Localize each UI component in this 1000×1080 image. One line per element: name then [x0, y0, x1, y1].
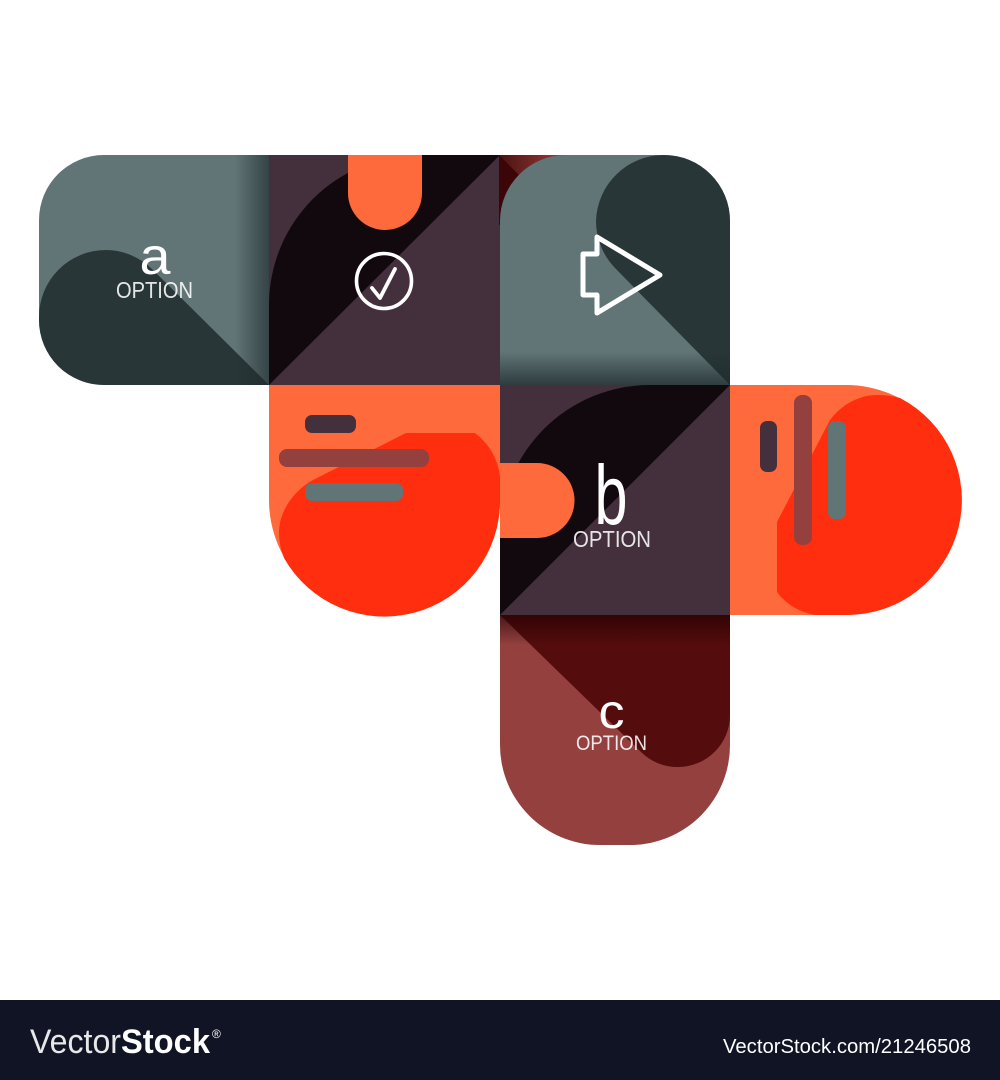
dark fold a	[39, 250, 269, 385]
corner fold behind play tile	[499, 155, 570, 225]
letter b: b	[594, 448, 628, 542]
dark fold c	[500, 615, 730, 767]
footer url: VectorStock.com/21246508	[723, 1036, 971, 1058]
label a: OPTION	[116, 277, 193, 303]
icon: check circle	[356, 254, 412, 308]
bar short	[305, 415, 356, 433]
panel: option c	[500, 615, 730, 845]
panel: orange bars horizontal	[269, 385, 500, 617]
panel: option a	[39, 155, 269, 385]
bar medium vertical	[828, 421, 846, 519]
bar long vertical	[794, 395, 812, 545]
label c: OPTION	[576, 732, 647, 755]
bar short vertical	[760, 421, 777, 472]
bar medium	[305, 483, 403, 501]
panel: play tile	[500, 155, 730, 385]
bar long	[279, 449, 429, 467]
red blob right	[777, 395, 962, 615]
panel: check tile	[269, 155, 500, 385]
label b: OPTION	[573, 526, 651, 552]
registered mark: ®	[212, 1027, 221, 1041]
panel: option b	[500, 385, 730, 615]
red blob	[279, 433, 500, 617]
dark fold check tile	[269, 155, 500, 385]
letter c: c	[598, 686, 624, 739]
orange tab side	[500, 463, 574, 538]
dark fold play tile	[596, 155, 730, 385]
icon: arrow	[583, 237, 660, 313]
dark fold b	[500, 385, 730, 615]
footer logo bold: Stock	[121, 1023, 210, 1061]
orange tab top	[348, 155, 422, 230]
panel: orange bars vertical	[730, 385, 962, 615]
footer logo: Vector	[30, 1023, 121, 1061]
letter a: a	[140, 228, 171, 286]
footer bar	[0, 1000, 1000, 1080]
